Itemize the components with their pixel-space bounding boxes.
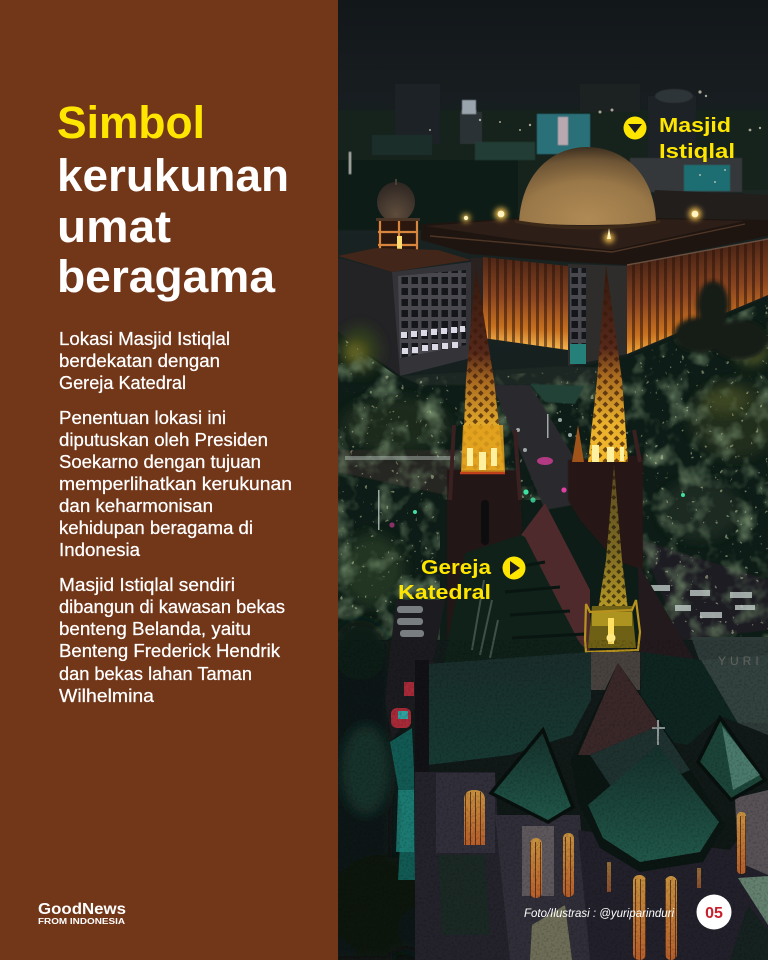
tree canopies bbox=[340, 326, 768, 606]
text block: paragraph 2: diputuskan oleh Presiden bbox=[59, 430, 268, 450]
small building roof bottom bbox=[530, 876, 768, 960]
mosque: roof lights bbox=[462, 208, 701, 243]
text block: paragraph 3 bbox=[59, 575, 285, 706]
text block: paragraph 2 bbox=[59, 408, 292, 560]
cathedral: main left roof bbox=[428, 652, 591, 765]
callout: Gereja Katedral: Gereja bbox=[421, 557, 492, 579]
page number badge: 05 bbox=[705, 905, 723, 922]
text block: paragraph 2: dan keharmonisan bbox=[59, 496, 213, 516]
title: beragama bbox=[57, 251, 276, 302]
callout: Masjid Istiqlal: Istiqlal bbox=[659, 141, 735, 163]
mosque: small tower dome bbox=[376, 179, 420, 250]
city skyline bbox=[338, 84, 768, 230]
photo grain bbox=[338, 640, 768, 960]
text block: paragraph 3: dan bekas lahan Taman bbox=[59, 664, 252, 684]
callout: Masjid Istiqlal: Masjid bbox=[659, 115, 731, 137]
spire: left bbox=[450, 268, 520, 500]
cathedral: nave roofs bbox=[440, 503, 768, 735]
logo: GoodNews from Indonesia bbox=[38, 901, 126, 926]
text block: paragraph 3: Masjid Istiqlal sendiri bbox=[59, 575, 235, 595]
left dark trees bbox=[338, 612, 415, 954]
photo credit: Foto/Ilustrasi : @yuriparinduri bbox=[524, 908, 674, 920]
spire: right bbox=[572, 265, 640, 462]
plaza lawn bbox=[530, 384, 584, 404]
cross bbox=[652, 720, 665, 745]
panel: aerial night photo of Istiqlal and the Cathedral bbox=[330, 0, 768, 960]
text block: paragraph 1: Gereja Katedral bbox=[59, 373, 186, 393]
dark tree by facade bbox=[674, 281, 768, 360]
icon: down-pointing marker bbox=[624, 116, 646, 140]
mosque: main roof bbox=[421, 218, 768, 265]
text block: paragraph 3: dibangun di kawasan bekas bbox=[59, 597, 285, 617]
mosque: right orange facade bbox=[627, 239, 768, 354]
callout: Gereja Katedral: Katedral bbox=[398, 582, 491, 604]
text block: paragraph 1: berdekatan dengan bbox=[59, 351, 220, 371]
cathedral: apse roofs and cones bbox=[491, 663, 765, 872]
text block: paragraph 2: Penentuan lokasi ini bbox=[59, 408, 226, 428]
text block: paragraph 2: Soekarno dengan tujuan bbox=[59, 452, 261, 472]
watermark: YURI bbox=[718, 654, 763, 668]
trees and plaza bbox=[338, 296, 768, 640]
foliage texture bbox=[338, 300, 768, 640]
mosque: left wing bbox=[338, 248, 471, 272]
text block: paragraph 1: Lokasi Masjid Istiqlal bbox=[59, 329, 230, 349]
street lights and cars bbox=[345, 414, 755, 618]
mosque: main dome bbox=[519, 147, 656, 225]
text block: paragraph 2: memperlihatkan kerukunan bbox=[59, 474, 292, 494]
title: umat bbox=[57, 201, 171, 252]
mosque back wall bbox=[654, 190, 768, 220]
cathedral: walls bbox=[415, 772, 768, 960]
central road bbox=[494, 385, 573, 510]
road beside cathedral bbox=[385, 600, 445, 880]
title bbox=[57, 97, 289, 302]
panel: brown text panel bbox=[0, 0, 338, 960]
cathedral: twin towers bbox=[447, 455, 643, 640]
icon: right-pointing marker bbox=[502, 556, 526, 580]
spire: front lit spire bbox=[585, 465, 640, 690]
mosque: left orange facade bbox=[483, 257, 568, 350]
text block: paragraph 2: Indonesia bbox=[59, 540, 141, 560]
callout: Gereja Katedral bbox=[398, 556, 526, 604]
logo: GoodNews from Indonesia: FROM INDONESIA bbox=[38, 917, 125, 926]
text block: paragraph 3: benteng Belanda, yaitu bbox=[59, 619, 251, 639]
text block: paragraph 2: kehidupan beragama di bbox=[59, 518, 253, 538]
callout: Masjid Istiqlal bbox=[624, 115, 735, 163]
logo: GoodNews from Indonesia: GoodNews bbox=[38, 901, 126, 918]
street and tree sparkle bbox=[338, 300, 768, 640]
title: kerukunan bbox=[57, 150, 289, 201]
text block: paragraph 3: Wilhelmina bbox=[59, 686, 155, 706]
title: Simbol bbox=[57, 97, 205, 148]
mosque: central stair tower bbox=[568, 264, 627, 366]
page number badge bbox=[696, 894, 732, 930]
text block: paragraph 1 bbox=[59, 329, 230, 393]
skyline lights bbox=[429, 90, 761, 183]
text block: paragraph 3: Benteng Frederick Hendrik bbox=[59, 641, 281, 661]
cathedral: lit windows bbox=[464, 790, 746, 960]
